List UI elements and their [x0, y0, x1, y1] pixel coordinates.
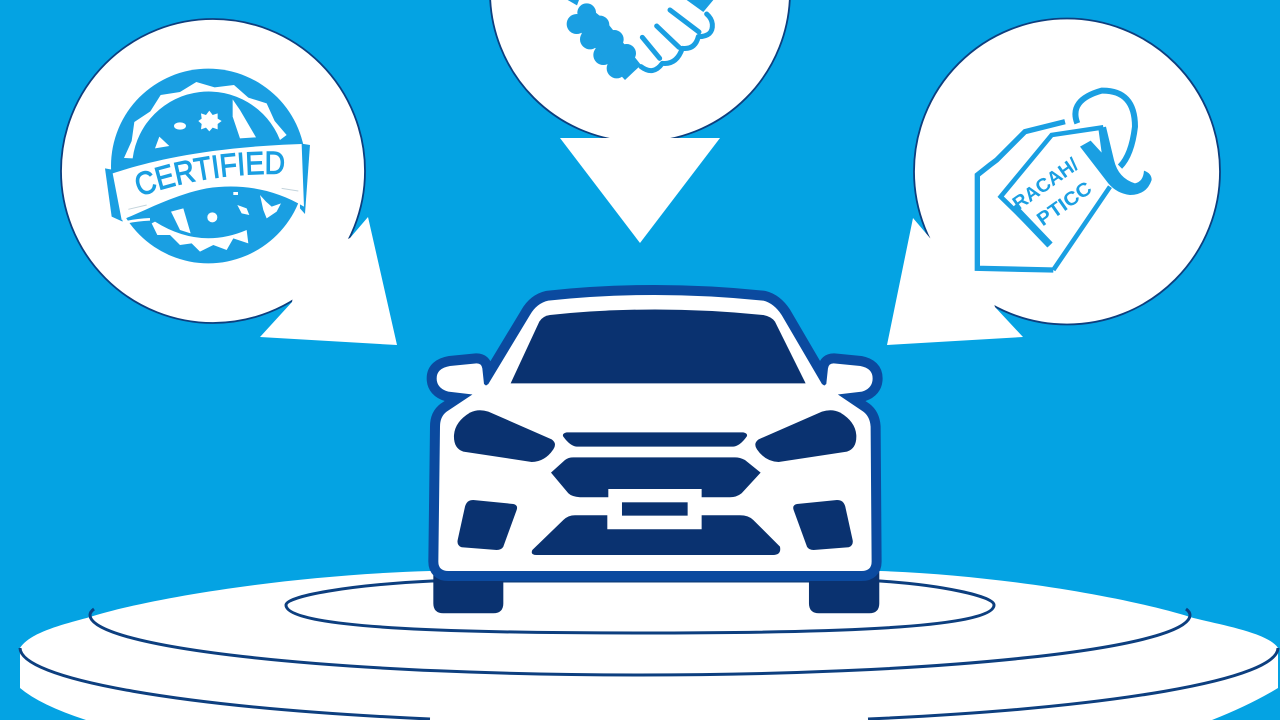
panel: podium platform — [20, 571, 1278, 720]
car headlight left — [454, 410, 555, 462]
car upper grille — [563, 432, 747, 447]
car fog light left — [457, 500, 517, 550]
arrow: handshake pointing to car — [560, 138, 720, 243]
car wheels — [433, 570, 879, 613]
panel: certified callout bubble — [60, 18, 397, 345]
panel: handshake callout bubble — [490, 0, 790, 243]
car headlight right — [755, 410, 856, 462]
car middle grille — [551, 457, 761, 497]
banner — [113, 144, 304, 220]
icon: handshake — [567, 0, 713, 80]
car body with mirrors — [437, 295, 873, 571]
arrow: price tag pointing to car — [887, 218, 1023, 345]
text: tag label line two: PTICC — [1033, 178, 1096, 231]
arrow: certified pointing to car — [260, 217, 397, 345]
car number plate — [622, 502, 688, 516]
car lower grille — [532, 515, 780, 555]
text: tag label line one: RACAH/ — [1009, 154, 1083, 215]
panel: car front view — [433, 295, 879, 613]
text: certified: CERTIFIED — [136, 151, 284, 194]
car fog light right — [793, 500, 853, 550]
panel: price tag callout bubble — [887, 18, 1220, 345]
icon: price tag — [977, 91, 1152, 270]
car windshield — [511, 309, 806, 383]
icon: certified badge — [105, 68, 310, 264]
